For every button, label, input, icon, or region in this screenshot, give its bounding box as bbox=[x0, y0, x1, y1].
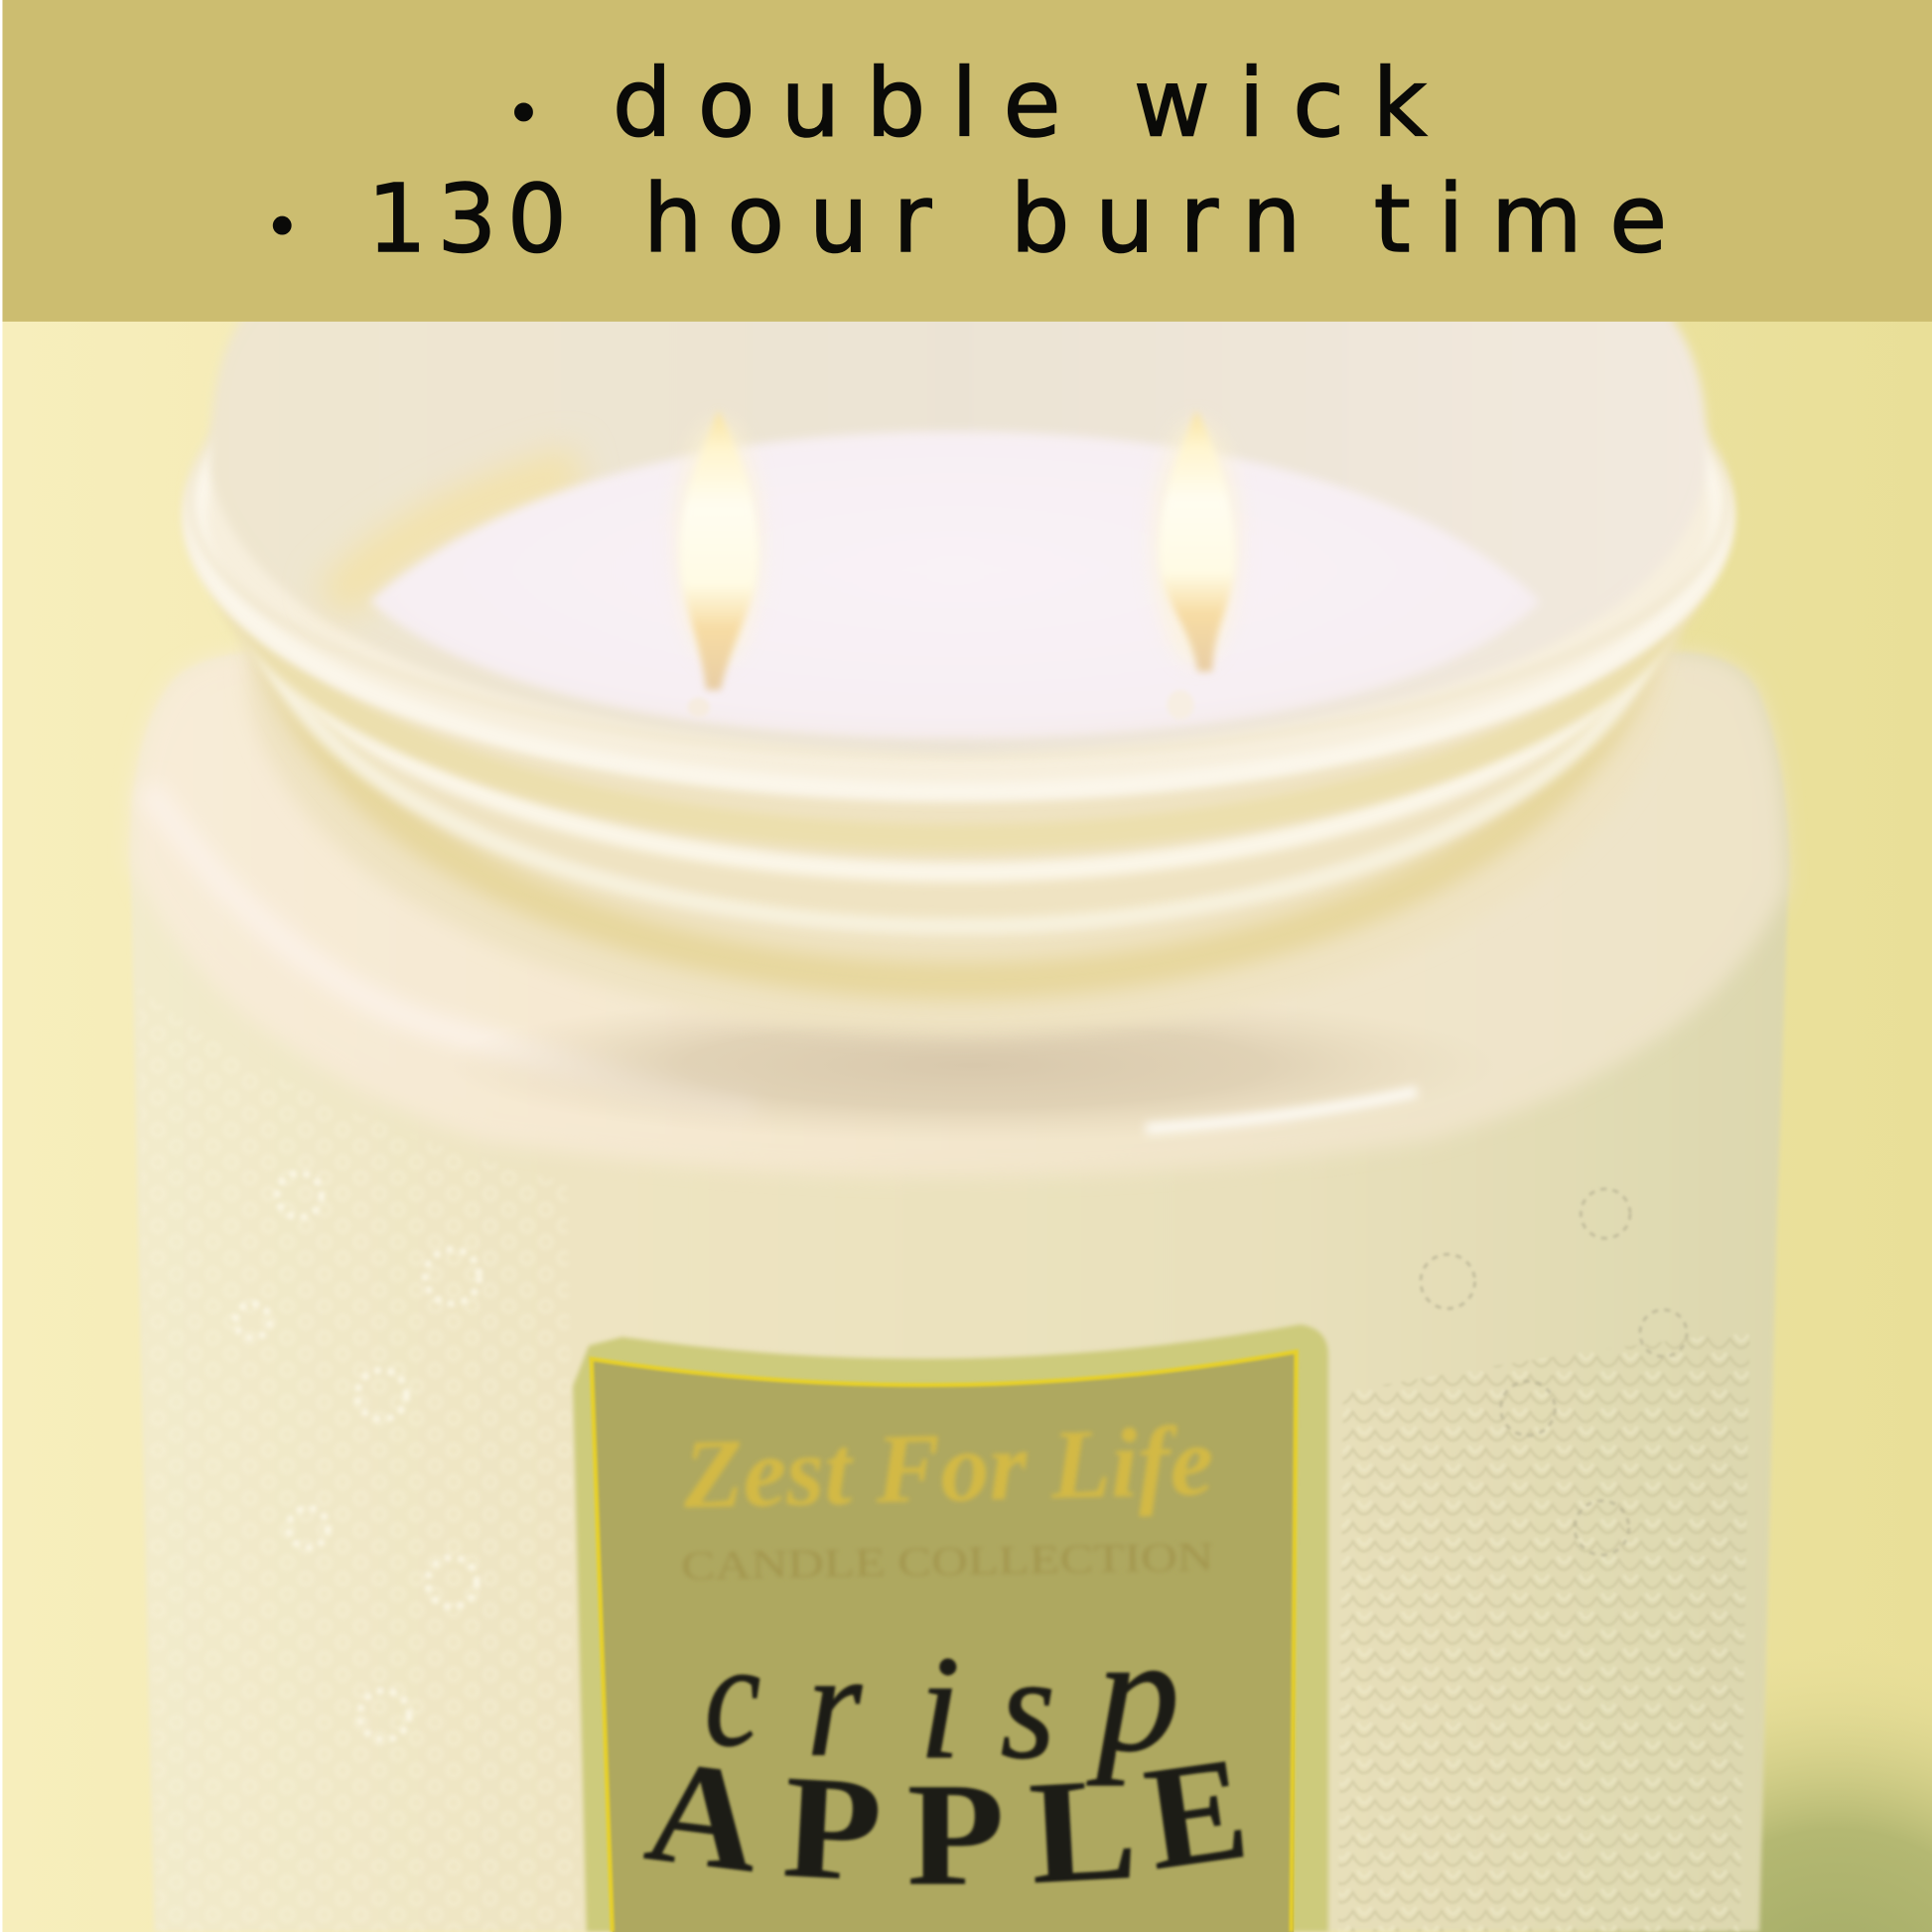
scent name APPLE: L bbox=[1026, 1745, 1141, 1915]
body shoulder bbox=[131, 653, 1787, 1176]
scent name crisp bbox=[705, 1602, 1179, 1790]
lace flowers left bbox=[235, 1173, 480, 1739]
feature: double wick: double bbox=[613, 50, 1061, 159]
header banner bbox=[2, 0, 1932, 322]
label face bbox=[592, 1351, 1297, 1932]
neck base shadow bbox=[444, 990, 1503, 1142]
feature: double wick bbox=[515, 50, 1428, 159]
scent name APPLE: P bbox=[779, 1743, 886, 1913]
flame left bbox=[674, 410, 762, 717]
brand name: Zest For Life bbox=[681, 1408, 1215, 1530]
flame right bbox=[1152, 410, 1241, 720]
feature: 130 hour burn time: time bbox=[1374, 165, 1667, 274]
lace flowers right bbox=[1421, 1189, 1687, 1555]
jar interior bbox=[209, 246, 1707, 755]
scent name crisp: c bbox=[705, 1613, 760, 1777]
jar body bbox=[131, 653, 1789, 1932]
jar neck threads bbox=[216, 203, 1701, 1035]
shoulder highlight bbox=[1146, 1092, 1417, 1129]
feature: 130 hour burn time: burn bbox=[1011, 165, 1302, 274]
scent name crisp: p bbox=[1087, 1602, 1179, 1786]
feature: double wick: wick bbox=[1134, 50, 1428, 159]
scent name crisp: s bbox=[1001, 1627, 1055, 1790]
scent name crisp: r bbox=[807, 1624, 862, 1787]
shoulder left glow bbox=[148, 788, 756, 1099]
candle jar bbox=[131, 203, 1789, 1932]
body lace texture right bbox=[1338, 1330, 1749, 1932]
scent name APPLE: P bbox=[906, 1752, 1005, 1916]
feature: 130 hour burn time: 130 bbox=[367, 165, 567, 274]
brand subtitle: CANDLE COLLECTION bbox=[681, 1534, 1214, 1588]
scent name APPLE: E bbox=[1137, 1725, 1257, 1901]
scent name APPLE: A bbox=[638, 1728, 769, 1904]
product label bbox=[573, 1324, 1328, 1932]
feature: 130 hour burn time bbox=[274, 165, 1667, 274]
jar rim bbox=[183, 239, 1734, 796]
label backing bbox=[573, 1324, 1328, 1932]
scent name APPLE bbox=[638, 1725, 1257, 1916]
body lace texture left bbox=[138, 986, 579, 1932]
feature: 130 hour burn time: hour bbox=[643, 165, 931, 274]
scent name crisp: i bbox=[919, 1626, 960, 1790]
wax surface bbox=[369, 431, 1540, 740]
label gold border bbox=[592, 1351, 1297, 1932]
